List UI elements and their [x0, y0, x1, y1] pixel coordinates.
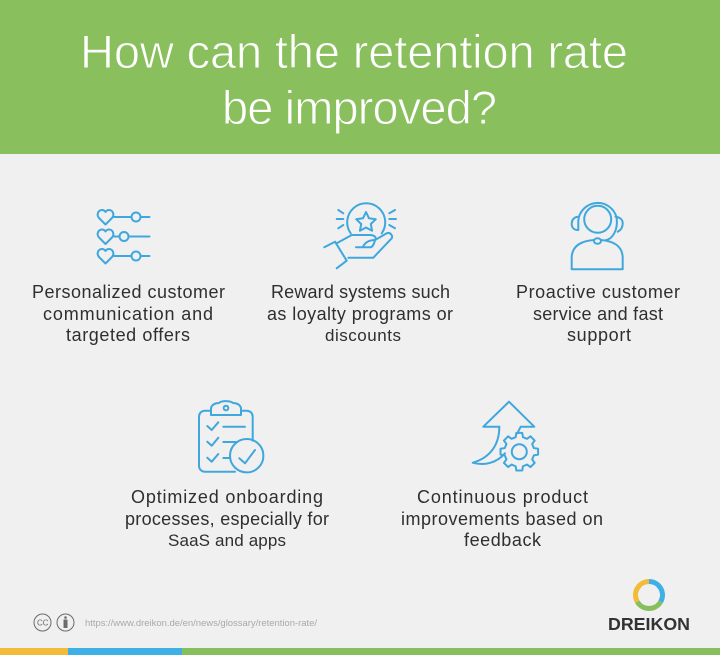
text: onboarding: Optimized onboarding: [131, 487, 323, 507]
logo: Dreikon: DREIKON: [608, 614, 690, 634]
icon: reward hand with star: [324, 203, 396, 268]
logo: Dreikon: [608, 582, 690, 634]
text: product improvements: feedback: [464, 530, 542, 550]
text: onboarding: [125, 487, 329, 550]
text: personalized communication: communication and: [43, 304, 213, 324]
logo ring: [636, 582, 662, 608]
text: reward systems: as loyalty programs or: [267, 304, 453, 324]
icon: creative commons badges: CC: [37, 618, 49, 628]
text: reward systems: [267, 282, 453, 345]
text: personalized communication: targeted offers: [66, 325, 190, 345]
source url: https://www.dreikon.de/en/news/glossary/retention-rate/: [85, 618, 317, 629]
icon: hearts and sliders: [98, 210, 150, 264]
title: [80, 25, 628, 134]
text: product improvements: Continuous product: [417, 487, 588, 507]
text: onboarding: SaaS and apps: [168, 531, 286, 550]
text: reward systems: discounts: [325, 326, 401, 345]
text: personalized communication: [32, 282, 225, 345]
text: proactive service: [516, 282, 680, 345]
bottom colour bar: [0, 648, 720, 655]
text: proactive service: Proactive customer: [516, 282, 680, 302]
icon: clipboard checklist: [199, 401, 263, 472]
icon: creative commons badges: [34, 614, 74, 631]
text: reward systems: Reward systems such: [271, 282, 450, 302]
text: proactive service: support: [567, 325, 631, 345]
text: proactive service: service and fast: [533, 304, 663, 324]
icon: upward arrow with gear: [473, 402, 538, 470]
text: product improvements: improvements based on: [401, 509, 603, 529]
title: be improved?: [222, 81, 497, 134]
text: product improvements: [401, 487, 603, 550]
icon: customer support agent: [572, 203, 623, 269]
text: onboarding: processes, especially for: [125, 509, 329, 529]
header banner: [0, 0, 720, 154]
text: personalized communication: Personalized customer: [32, 282, 225, 302]
title: How can the retention rate: [80, 25, 628, 78]
